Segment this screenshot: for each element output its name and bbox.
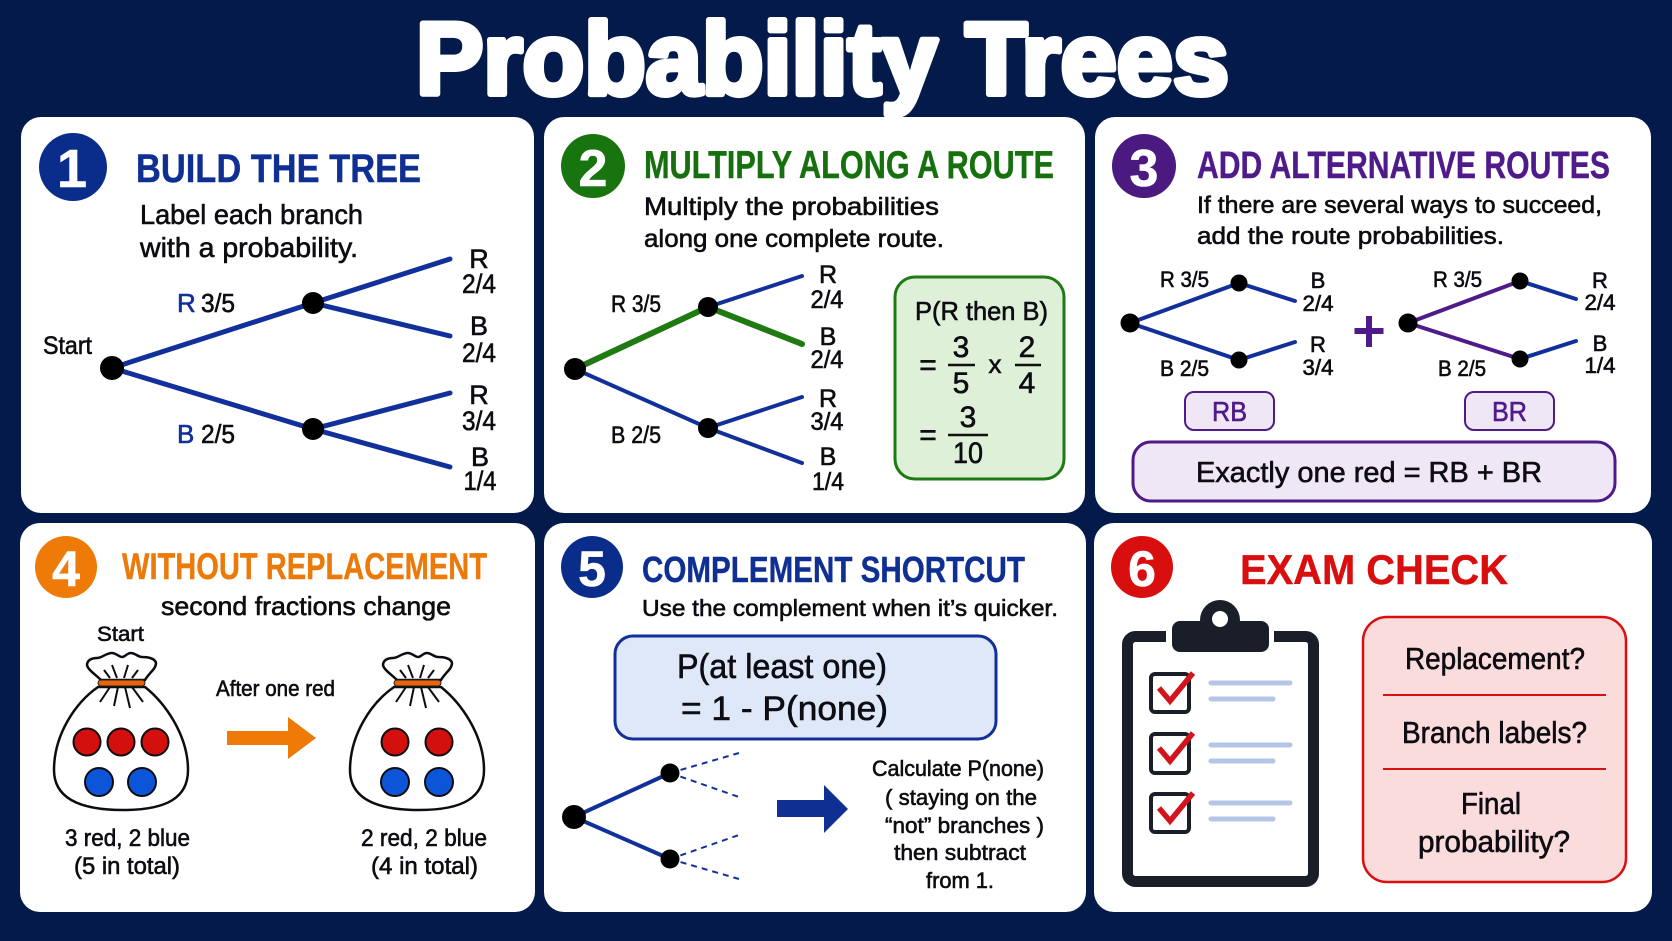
probability tree xyxy=(43,244,496,496)
probability tree: Start xyxy=(43,332,92,360)
calculation box: 10 xyxy=(953,437,983,470)
calculation box: P(R then B) xyxy=(915,296,1048,326)
number badge 4: 4 xyxy=(52,541,80,597)
number badge 3 xyxy=(1112,134,1176,198)
probability tree: 2/4 xyxy=(462,338,496,368)
number badge 2: 2 xyxy=(579,140,607,198)
probability tree with highlighted route: R xyxy=(819,261,837,289)
bag 2 caption: 2 red, 2 blue xyxy=(361,825,487,852)
description xyxy=(644,193,944,253)
calculation box: 3 xyxy=(953,331,969,364)
explanation xyxy=(872,756,1044,893)
right route tree: B xyxy=(1593,331,1607,356)
probability tree: R xyxy=(177,288,196,318)
left route tree: R xyxy=(1310,332,1326,357)
calculation box: 5 xyxy=(953,367,969,400)
probability tree with highlighted route: R xyxy=(819,385,837,413)
description xyxy=(139,199,363,263)
number badge 6: 6 xyxy=(1128,541,1156,597)
right route tree: R 3/5 xyxy=(1433,267,1482,292)
route tag BR: BR xyxy=(1492,396,1527,427)
probability tree with highlighted route: B 2/5 xyxy=(611,422,661,449)
description xyxy=(1197,192,1602,250)
probability tree: 3/5 xyxy=(201,288,235,318)
panel: without replacement xyxy=(20,523,535,912)
start label: Start xyxy=(97,623,144,646)
result box xyxy=(1133,442,1615,501)
calculation box: = xyxy=(919,349,937,382)
bag 1 caption: (5 in total) xyxy=(74,853,180,880)
arrow: orange xyxy=(227,717,316,759)
probability tree: B xyxy=(471,442,489,472)
probability tree with highlighted route: B xyxy=(820,323,836,351)
icon: clipboard checklist xyxy=(1128,600,1314,882)
probability tree with highlighted route xyxy=(564,261,844,496)
tree with dashed not branches xyxy=(562,753,739,879)
explanation: then subtract xyxy=(894,840,1026,865)
bag 1 caption: 3 red, 2 blue xyxy=(65,825,190,852)
calculation box: 4 xyxy=(1019,367,1035,400)
panel: multiply along a route xyxy=(544,117,1085,513)
explanation: ( staying on the xyxy=(885,785,1037,810)
probability tree with highlighted route: 1/4 xyxy=(812,468,844,496)
left route tree: B xyxy=(1311,268,1325,293)
arrow label: After one red xyxy=(216,676,335,701)
description: with a probability. xyxy=(139,232,358,263)
probability tree with highlighted route: 3/4 xyxy=(810,408,844,436)
arrow: blue xyxy=(777,785,848,833)
probability tree: 2/4 xyxy=(462,269,496,299)
title: Probability Trees xyxy=(416,2,1229,116)
probability tree: R xyxy=(469,380,489,410)
right route tree: R xyxy=(1592,268,1608,293)
description: Label each branch xyxy=(140,199,363,230)
bag 1 caption xyxy=(65,825,190,880)
right route tree: 1/4 xyxy=(1584,353,1616,378)
formula box: P(at least one) xyxy=(677,648,887,686)
calculation box: 2 xyxy=(1019,331,1035,364)
probability tree with highlighted route: 2/4 xyxy=(810,286,844,314)
heading: build the tree: BUILD THE TREE xyxy=(136,147,421,191)
number badge 4 xyxy=(35,536,97,598)
calculation box: x xyxy=(988,349,1002,379)
probability tree: 3/4 xyxy=(462,406,496,436)
probability tree: B xyxy=(470,311,488,341)
number badge 5: 5 xyxy=(578,541,606,597)
probability tree: 1/4 xyxy=(464,466,496,496)
number badge 1 xyxy=(39,133,107,201)
panel: complement shortcut xyxy=(544,523,1086,912)
formula box: = 1 - P(none) xyxy=(681,690,888,728)
left route tree: 2/4 xyxy=(1302,291,1334,316)
icon: bag with 3 red and 2 blue marbles xyxy=(54,653,188,810)
route tag RB xyxy=(1185,392,1274,430)
description: along one complete route. xyxy=(644,225,944,253)
number badge 1: 1 xyxy=(57,139,87,199)
heading: exam check: EXAM CHECK xyxy=(1240,546,1508,593)
probability tree: 2/5 xyxy=(201,419,235,449)
plus sign xyxy=(1354,316,1384,347)
result box: Exactly one red = RB + BR xyxy=(1196,457,1542,489)
number badge 5 xyxy=(561,536,623,598)
description: Use the complement when it’s quicker. xyxy=(642,595,1058,621)
explanation: Calculate P(none) xyxy=(872,756,1044,781)
checklist box: Replacement? xyxy=(1405,641,1585,676)
description: add the route probabilities. xyxy=(1197,223,1504,250)
bag 2 caption xyxy=(361,825,487,880)
description: If there are several ways to succeed, xyxy=(1197,192,1602,219)
checklist box: probability? xyxy=(1418,824,1570,859)
explanation: “not” branches ) xyxy=(885,813,1044,838)
probability tree with highlighted route: R 3/5 xyxy=(611,291,661,318)
panel: build the tree xyxy=(21,117,534,513)
left route tree: R 3/5 xyxy=(1160,267,1209,292)
number badge 3: 3 xyxy=(1130,140,1158,198)
probability tree with highlighted route: B xyxy=(820,443,836,471)
route tag RB: RB xyxy=(1212,396,1247,427)
checklist box: Final xyxy=(1461,786,1521,821)
checklist box: Branch labels? xyxy=(1402,715,1587,750)
heading: complement shortcut: COMPLEMENT SHORTCUT xyxy=(642,549,1025,590)
left route tree xyxy=(1120,267,1334,381)
calculation box: 3 xyxy=(960,401,976,434)
right route tree: 2/4 xyxy=(1584,290,1616,315)
left route tree: 3/4 xyxy=(1302,355,1334,380)
calculation box xyxy=(895,277,1064,479)
probability tree with highlighted route: 2/4 xyxy=(810,346,844,374)
panel: add alternative routes xyxy=(1095,117,1651,513)
panel: exam check xyxy=(1094,523,1652,912)
probability tree: R xyxy=(469,244,489,274)
number badge 2 xyxy=(561,134,625,198)
explanation: from 1. xyxy=(926,868,994,893)
route tag BR xyxy=(1465,392,1554,430)
icon: bag with 2 red and 2 blue marbles xyxy=(350,653,484,810)
bag 2 caption: (4 in total) xyxy=(371,853,478,880)
heading: without replacement: WITHOUT REPLACEMENT xyxy=(122,546,487,587)
right route tree xyxy=(1398,267,1616,381)
description: Multiply the probabilities xyxy=(644,193,939,221)
subheading: second fractions change xyxy=(161,591,451,621)
right route tree: B 2/5 xyxy=(1438,356,1486,381)
heading: multiply along a route: MULTIPLY ALONG A ROUTE xyxy=(644,144,1054,187)
probability tree: B xyxy=(177,419,194,449)
calculation box: = xyxy=(919,419,937,452)
checklist box xyxy=(1363,617,1626,882)
number badge 6 xyxy=(1111,536,1173,598)
formula box xyxy=(615,636,996,739)
left route tree: B 2/5 xyxy=(1160,356,1209,381)
